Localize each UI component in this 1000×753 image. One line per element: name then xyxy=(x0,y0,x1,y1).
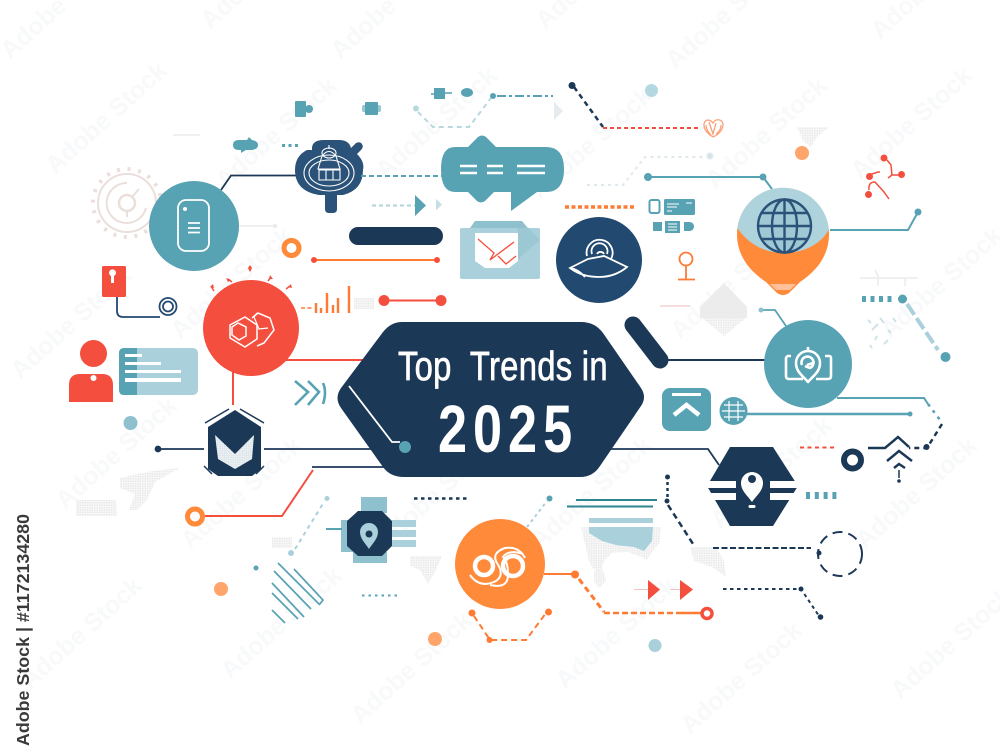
orange dashed short xyxy=(565,205,634,209)
light teal dot bottom xyxy=(648,639,662,652)
teal dotted short xyxy=(362,594,398,596)
icon: faint gear xyxy=(93,169,161,237)
faint diamond xyxy=(700,283,747,318)
icon: brain blob xyxy=(295,140,363,213)
faint triangle xyxy=(554,102,563,120)
dashed light path xyxy=(413,98,491,127)
connector: globe to right xyxy=(830,210,920,230)
connector: camera top xyxy=(758,308,786,326)
icon: heart scribble xyxy=(704,120,723,137)
icon: navy hexagon with pin xyxy=(707,447,798,526)
watermark pattern: Adobe Stock xyxy=(665,221,798,344)
connector: capsule to camera xyxy=(668,359,766,361)
watermark pattern: Adobe Stock xyxy=(850,431,983,554)
watermark pattern: Adobe Stock xyxy=(165,221,298,344)
stock id caption: Adobe Stock | #1172134280 xyxy=(13,514,33,746)
icon: phone circle xyxy=(149,181,239,271)
watermark pattern: Adobe Stock xyxy=(175,431,308,554)
icon: red key card with coil xyxy=(102,266,176,317)
orange bars chart xyxy=(301,286,349,313)
icon: navy hexagon with chevron xyxy=(204,409,264,476)
watermark pattern: Adobe Stock xyxy=(675,616,808,739)
faint halftone shapes xyxy=(76,127,829,584)
watermark pattern: Adobe Stock xyxy=(370,431,503,554)
icon: red node xyxy=(203,265,299,376)
light dashed diagonal xyxy=(288,496,330,556)
icon: globe pin xyxy=(737,188,829,295)
icon: orange ring low xyxy=(188,509,202,524)
watermark pattern: Adobe Stock xyxy=(15,571,148,694)
connector: orange ring to centre xyxy=(205,470,313,516)
red dumbbell xyxy=(378,295,446,306)
watermark pattern: Adobe Stock xyxy=(845,61,978,184)
icon: small chip xyxy=(362,102,381,115)
dashed light right xyxy=(587,154,712,185)
icon: small cards xyxy=(650,199,695,233)
navy dotted path with circle xyxy=(664,474,862,576)
icon: orange pin stand xyxy=(678,252,695,280)
navy dotted path lower xyxy=(723,586,823,620)
title line 1: Top Trends in xyxy=(398,342,608,389)
icon: navy circle with hat xyxy=(556,217,642,303)
icon: mini globe with line xyxy=(720,397,912,425)
icon: navy chevrons xyxy=(868,437,912,483)
icon: envelope folder xyxy=(460,221,540,279)
watermark pattern: Adobe Stock xyxy=(550,571,683,694)
dashed node top right xyxy=(862,294,950,362)
watermark pattern: Adobe Stock xyxy=(700,71,833,194)
striped block xyxy=(272,563,323,623)
icon: person xyxy=(69,340,113,402)
card with lines xyxy=(119,348,198,395)
icon: small puzzle xyxy=(295,101,313,117)
orange dashed under xyxy=(468,608,552,643)
dashed arrow xyxy=(372,195,442,216)
orange dashed to red ring xyxy=(544,570,712,618)
watermark pattern: Adobe Stock xyxy=(705,411,838,534)
orange dot left xyxy=(214,582,228,596)
title line 2: 2025 xyxy=(438,392,572,466)
navy pill xyxy=(349,227,443,245)
dot light teal top xyxy=(645,84,658,97)
light dashed to dot xyxy=(527,496,552,527)
icon: orange circle with swirls xyxy=(455,519,545,609)
red dashes xyxy=(800,446,837,448)
icon: small fish xyxy=(233,137,258,153)
faint decorations xyxy=(173,135,918,348)
watermark pattern: Adobe Stock xyxy=(215,561,348,684)
panel: central title badge xyxy=(338,322,644,477)
icon: speech bubble xyxy=(441,136,564,211)
watermark pattern: Adobe Stock xyxy=(5,261,138,384)
chevron arrows xyxy=(295,381,325,405)
orange dot top xyxy=(795,146,809,160)
connector: hexagon to centre xyxy=(156,446,387,467)
connector: centre to hex xyxy=(608,449,719,465)
dots by brain xyxy=(282,144,299,147)
watermark pattern: Adobe Stock xyxy=(50,391,183,514)
watermark pattern: Adobe Stock xyxy=(40,56,173,179)
badge inner line xyxy=(349,386,411,453)
watermark pattern: Adobe Stock xyxy=(345,606,478,729)
watermark pattern: Adobe Stock xyxy=(525,431,658,554)
connector: red node lines xyxy=(233,360,371,405)
teal dashes xyxy=(806,492,840,499)
orange dot bottom xyxy=(428,632,442,646)
dashed navy and red line xyxy=(568,82,700,128)
top teal node row xyxy=(431,88,553,99)
dashed teal to bubble xyxy=(361,175,442,177)
icon: orange ring xyxy=(284,240,299,256)
watermark pattern: Adobe Stock xyxy=(370,61,503,184)
dot light teal left xyxy=(124,416,138,430)
navy capsule xyxy=(633,325,660,360)
watermark pattern: Adobe Stock xyxy=(525,81,658,204)
teal line to globe xyxy=(645,174,772,189)
connector: phone to brain xyxy=(221,176,297,190)
navy ring xyxy=(844,452,861,468)
orange line with red dots xyxy=(311,257,440,263)
watermark pattern: Adobe Stock xyxy=(210,71,343,194)
map block xyxy=(567,500,661,588)
icon: red network xyxy=(865,154,905,199)
small teal dot xyxy=(254,566,258,570)
connector: camera right dashed xyxy=(837,398,942,450)
red triangles xyxy=(634,580,693,600)
icon: chip with pin xyxy=(326,497,416,563)
icon: chevron tile xyxy=(662,388,711,431)
navy dashes centre bottom xyxy=(414,497,470,500)
icon: camera circle xyxy=(764,320,852,408)
